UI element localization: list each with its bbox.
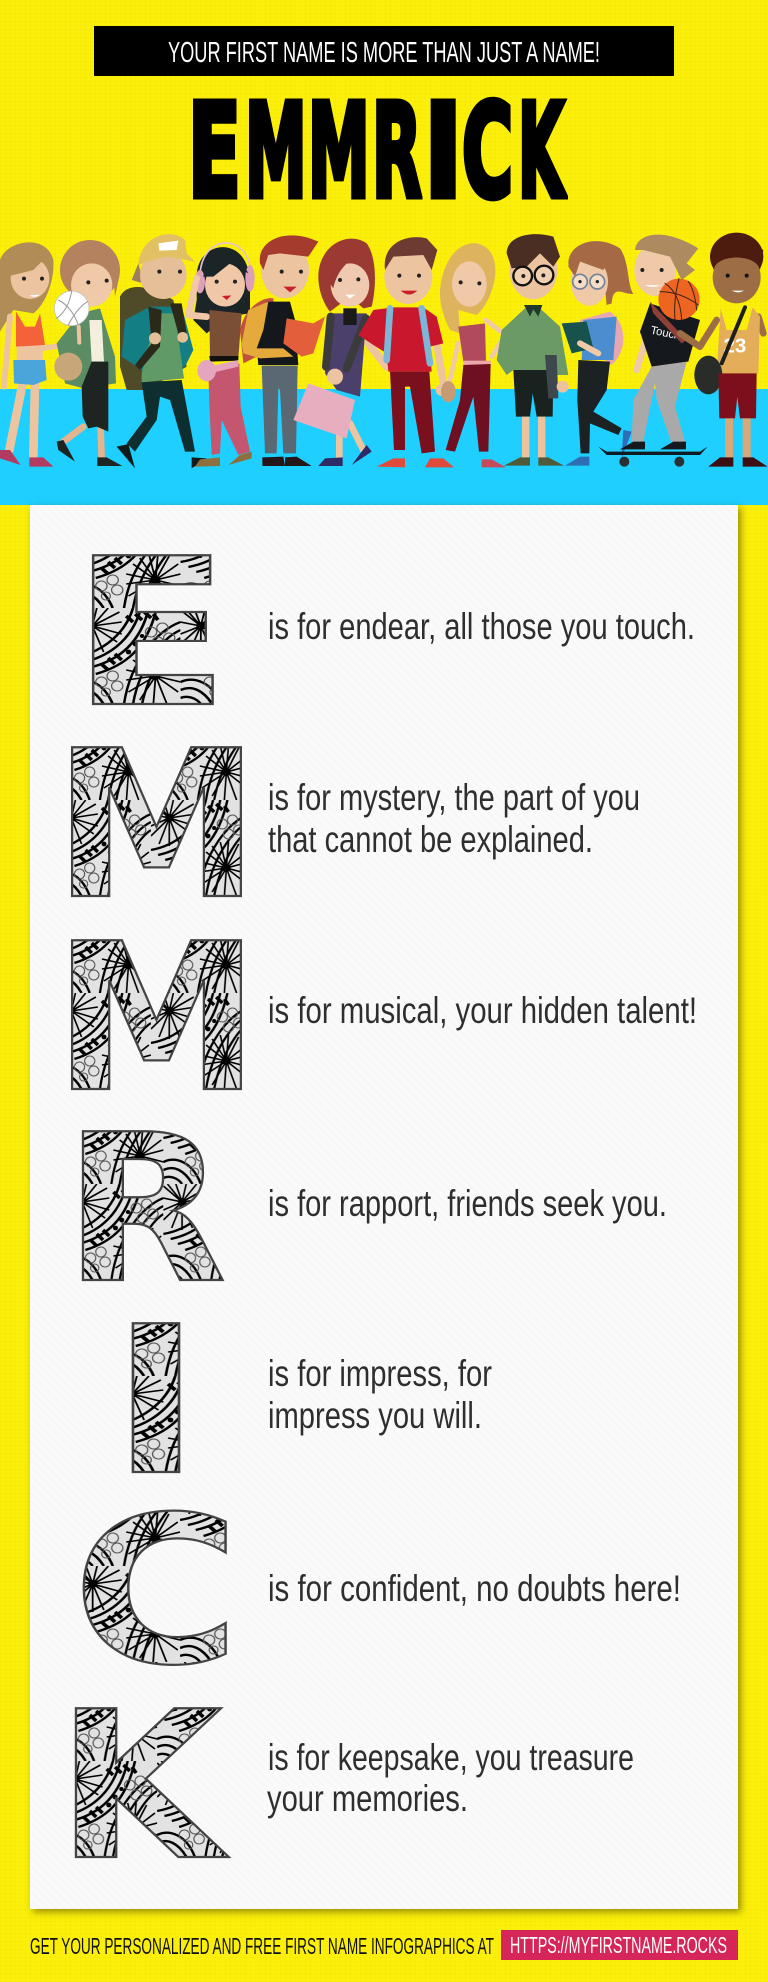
- figure: boy reading a red book: [240, 235, 325, 466]
- row: second M: [53, 900, 697, 1138]
- letter M: M: [53, 707, 260, 945]
- title: name: I: [424, 77, 462, 227]
- title: name: C: [462, 77, 513, 227]
- illustration: row of thirteen young people: [0, 232, 768, 505]
- header banner: [94, 26, 674, 76]
- M text: [268, 777, 640, 860]
- letter K: K: [56, 1669, 229, 1906]
- K text: is for keepsake, you treasure: [268, 1737, 634, 1778]
- shirt print: Touch: [649, 325, 681, 343]
- figure: ponytail girl with tablet: [562, 241, 633, 466]
- row: R: [64, 1092, 667, 1329]
- figure: hiker with cap and backpack: [117, 234, 207, 468]
- I text: [268, 1353, 492, 1436]
- figure: boy in red shirt: [358, 237, 454, 467]
- footer url badge: [501, 1930, 738, 1960]
- letter I: I: [110, 1284, 202, 1521]
- figure: boy with black glasses and green sweater: [497, 234, 569, 466]
- letter C: C: [72, 1474, 240, 1711]
- title: name: M: [308, 77, 370, 227]
- K text: your memories.: [267, 1778, 468, 1819]
- M text: that cannot be explained.: [268, 819, 593, 860]
- figure: red-haired girl with pink bag: [293, 239, 375, 466]
- title: name: M: [245, 77, 307, 227]
- figure: girl in green jacket with volleyball: [54, 240, 122, 466]
- row: I: [110, 1284, 492, 1521]
- row: K: [56, 1669, 634, 1906]
- figure: curly-haired boy in jersey: [694, 233, 768, 467]
- title: name: K: [518, 77, 564, 227]
- panel: name acrostic: [30, 505, 738, 1909]
- title: name: [188, 77, 568, 227]
- letter E: E: [72, 516, 229, 753]
- jersey number: 23: [723, 335, 746, 358]
- M text: is for mystery, the part of you: [268, 777, 640, 818]
- letter R: R: [64, 1092, 227, 1329]
- row: E: [72, 516, 695, 753]
- I text: impress you will.: [268, 1395, 482, 1436]
- title: name: R: [372, 77, 421, 227]
- figure: skater with basketball: [598, 235, 717, 467]
- floor band: [0, 389, 768, 505]
- letter M: M: [53, 900, 260, 1138]
- title: name: E: [188, 77, 241, 227]
- figure: girl in orange top: [0, 242, 72, 467]
- figure: blonde girl: [440, 243, 506, 467]
- figure: girl with pink headphones: [188, 243, 255, 467]
- row: M: [53, 707, 640, 945]
- I text: is for impress, for: [268, 1353, 492, 1394]
- K text: [267, 1737, 634, 1819]
- row: C: [72, 1474, 681, 1711]
